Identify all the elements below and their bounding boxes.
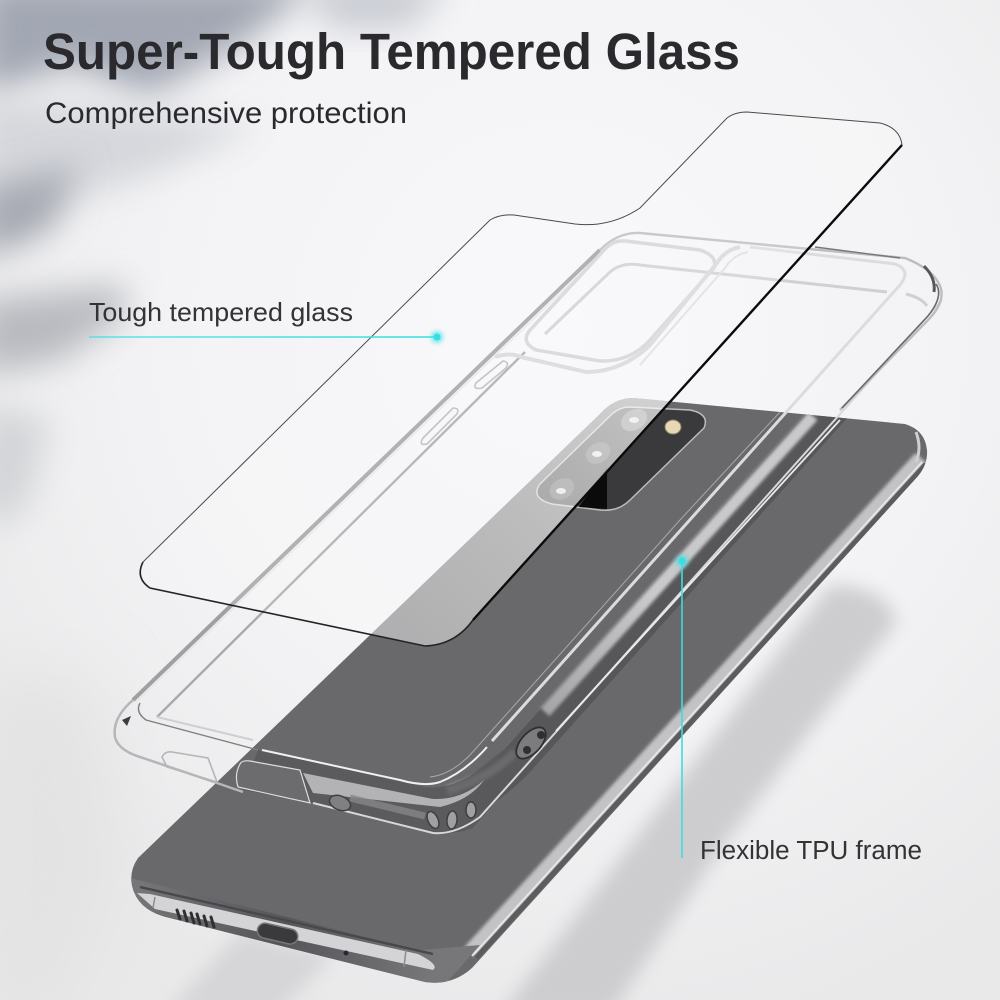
lenses <box>617 404 651 436</box>
mic ports in frame <box>327 792 353 814</box>
callout: tough tempered glass <box>89 297 443 343</box>
callout: flexible TPU frame: Flexible TPU frame <box>700 837 922 865</box>
phone back <box>120 398 927 990</box>
mic hole <box>344 950 348 956</box>
corner lower left <box>115 700 243 792</box>
left wall stripes <box>133 250 600 700</box>
dark triangle <box>579 467 607 509</box>
side buttons <box>475 361 507 388</box>
phone cast shadow <box>500 585 897 1000</box>
glass black edge <box>473 145 902 620</box>
glass thin outline <box>143 112 902 562</box>
phone curved side <box>470 432 926 958</box>
inner edge <box>262 747 487 784</box>
camera cutout <box>526 241 715 361</box>
side button port <box>511 722 551 764</box>
callout: tough tempered glass: Tough tempered glass <box>89 297 353 327</box>
usb opening in frame <box>162 752 217 782</box>
title: Super-Tough Tempered Glass <box>43 23 740 80</box>
right wall over phone <box>447 395 845 800</box>
horizontal rim <box>640 265 927 306</box>
callout: flexible TPU frame <box>676 555 922 865</box>
glass bottom edge <box>140 562 473 646</box>
lower shadow <box>165 932 335 1000</box>
speaker grille <box>177 910 214 927</box>
usb-c port <box>256 922 299 946</box>
tpu frame <box>115 233 942 833</box>
tempered glass <box>140 112 902 646</box>
frame outer bottom edge <box>313 300 942 833</box>
charge cutout <box>236 761 310 803</box>
subtitle: Comprehensive protection <box>45 97 407 130</box>
flash <box>665 420 681 434</box>
glass tint over phone <box>372 398 668 646</box>
phone bottom edge <box>120 878 480 990</box>
camera module <box>537 404 705 510</box>
background leaf shadows <box>0 0 450 1000</box>
corner dark mark <box>122 716 131 726</box>
bottom wall <box>243 745 545 833</box>
